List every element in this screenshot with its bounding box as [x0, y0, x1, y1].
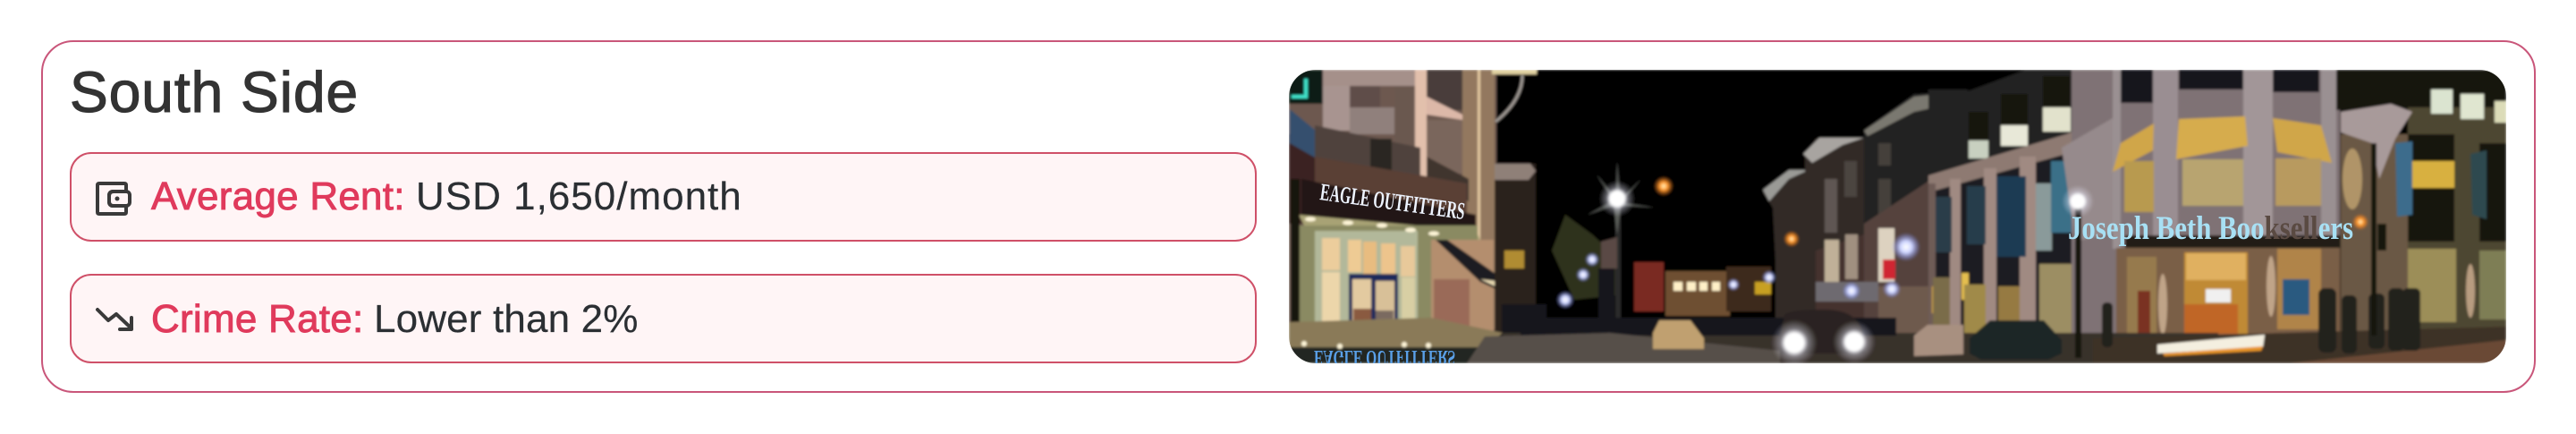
street lamps and lights	[1556, 161, 2368, 366]
bookstore ground floor	[2116, 235, 2353, 337]
icon: wallet	[96, 182, 131, 216]
storefront downlights	[1301, 217, 1439, 349]
traffic signal	[1289, 70, 1323, 104]
value: USD 1,650/month: USD 1,650/month	[416, 174, 742, 218]
title: South Side: South Side	[70, 60, 359, 124]
photo: South Side street at night	[1289, 70, 2506, 363]
awnings	[2113, 116, 2332, 172]
corner tower	[2062, 70, 2340, 338]
right row of buildings	[1760, 70, 2071, 335]
upper shop windows	[2124, 158, 2321, 212]
sign: Eagle Outfitters: EAGLE OUTFITTERS	[1318, 178, 1467, 225]
value: lower than 2%: Lower than 2%	[374, 297, 638, 341]
left building	[1289, 70, 1496, 338]
label: crime rate: Crime Rate:	[151, 297, 363, 341]
cars	[1653, 310, 2062, 360]
eagle sign band and canopy	[1299, 179, 1480, 240]
label: average rent: Average Rent:	[151, 174, 405, 218]
pedestrians	[2102, 288, 2420, 353]
sky	[1495, 70, 2410, 338]
road and foreground	[1289, 318, 2506, 363]
left banners	[1936, 161, 2072, 257]
distant street	[1634, 262, 1771, 316]
upper lit windows of long block	[1927, 76, 2072, 161]
tree and street lamp pole	[1551, 208, 1623, 319]
right banners	[2395, 141, 2487, 219]
panel: crime rate row	[70, 274, 1257, 363]
panel: South Side card	[41, 40, 2536, 393]
long pink facade	[1927, 132, 2073, 335]
icon: trending down	[95, 308, 134, 331]
far building and lamp arm	[1492, 70, 1546, 338]
eagle storefront	[1290, 178, 1497, 332]
light streak	[2157, 335, 2265, 356]
panel: average rent row	[70, 152, 1257, 242]
right wing	[2336, 70, 2506, 336]
sign: Joseph Beth Booksellers: Joseph Beth Booksellers	[2068, 210, 2353, 247]
poles	[2075, 143, 2386, 358]
reflection: Eagle Outfitters: EAGLE OUTFITTERS	[1314, 345, 1455, 369]
